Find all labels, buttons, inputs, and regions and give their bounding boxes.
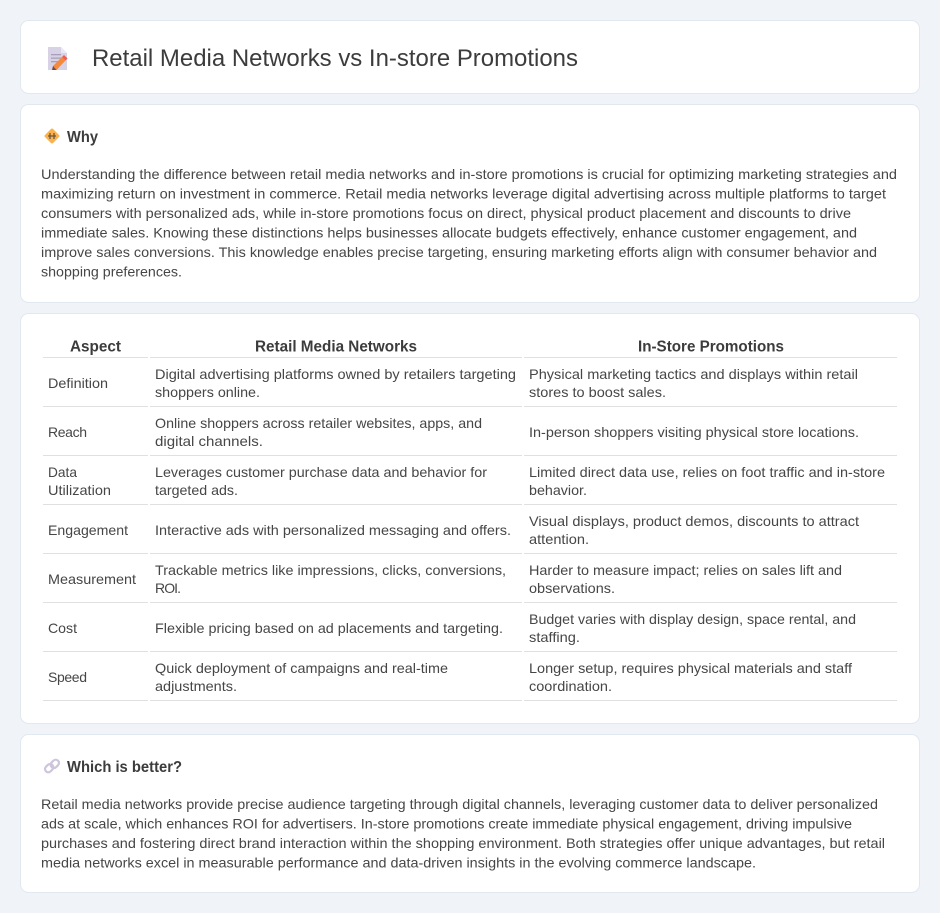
row: engagement: Interactive ads with personalized messaging and offers. <box>155 522 511 538</box>
row: measurement: Measurement <box>48 571 136 587</box>
text block: why paragraph: maximizing return on investment in commerce. Retail media networks leverage digital advertising across multiple platforms to target <box>41 186 886 202</box>
panel: why <box>20 104 920 302</box>
row: definition: Physical marketing tactics and displays within retail <box>529 366 858 382</box>
row: data utilization: Utilization <box>48 482 111 498</box>
table header row <box>70 338 784 356</box>
text block: why paragraph: shopping preferences. <box>41 264 182 280</box>
text block: why paragraph: immediate sales. Knowing these distinctions helps businesses allocate budgets effectively, enhance customer engagement, and <box>41 224 857 240</box>
text block: which is better paragraph: purchases and fostering direct brand interaction within the shopping environment. Both strategies offer unique advantages, but retail <box>41 835 885 851</box>
row: cost: Flexible pricing based on ad placements and targeting. <box>155 620 503 636</box>
row: reach: Reach <box>48 424 87 440</box>
row: reach: In-person shoppers visiting physical store locations. <box>529 424 859 440</box>
row: cost: staffing. <box>529 629 580 645</box>
icon: chain link <box>44 758 60 774</box>
row: cost: Budget varies with display design, space rental, and <box>529 611 856 627</box>
row: data utilization: behavior. <box>529 482 587 498</box>
row: engagement <box>48 513 859 547</box>
row: reach <box>48 415 859 449</box>
text block: which is better paragraph: Retail media networks provide precise audience targeting through digital channels, leveraging customer data to deliver personalized <box>41 796 878 812</box>
row: data utilization: Data <box>48 464 77 480</box>
row: measurement: ROI. <box>155 580 181 596</box>
row: cost: Cost <box>48 620 77 636</box>
row: definition: shoppers online. <box>155 384 260 400</box>
text block: why paragraph: consumers with personalized ads, while in-store promotions focus on direct, physical product placement and discounts to drive <box>41 205 851 221</box>
panel: title header <box>20 20 920 94</box>
row: measurement: Trackable metrics like impressions, clicks, conversions, <box>155 562 506 578</box>
row: measurement <box>48 562 842 596</box>
heading: which is better: Which is better? <box>67 759 182 776</box>
row: speed: Speed <box>48 669 87 685</box>
row: speed: Quick deployment of campaigns and real-time <box>155 660 448 676</box>
row: definition: Digital advertising platforms owned by retailers targeting <box>155 366 516 382</box>
row: data utilization: targeted ads. <box>155 482 238 498</box>
row: speed <box>48 660 852 694</box>
row: definition <box>48 366 858 400</box>
row: reach: digital channels. <box>155 433 263 449</box>
text block: why paragraph: Understanding the difference between retail media networks and in-store promotions is crucial for optimizing marketing strategies and <box>41 166 897 182</box>
icon: warning diamond <box>44 128 60 144</box>
table header row: In-Store Promotions <box>638 338 784 356</box>
text block: which is better paragraph: ads at scale, which enhances ROI for advertisers. In-store promotions create immediate physical engagement, driving impulsive <box>41 816 852 832</box>
text block: why paragraph <box>41 166 897 280</box>
row: definition: Definition <box>48 375 108 391</box>
row: speed: adjustments. <box>155 678 237 694</box>
row: data utilization: Leverages customer purchase data and behavior for <box>155 464 487 480</box>
text block: which is better paragraph: media networks excel in measurable performance and data-driven insights in the evolving commerce landscape. <box>41 854 756 870</box>
row: engagement: attention. <box>529 531 589 547</box>
row: speed: coordination. <box>529 678 612 694</box>
row: speed: Longer setup, requires physical materials and staff <box>529 660 852 676</box>
row: reach: Online shoppers across retailer websites, apps, and <box>155 415 482 431</box>
panel: which is better <box>20 734 920 892</box>
row: engagement: Engagement <box>48 522 128 538</box>
row: data utilization: Limited direct data use, relies on foot traffic and in-store <box>529 464 885 480</box>
row: definition: stores to boost sales. <box>529 384 666 400</box>
row: data utilization <box>48 464 885 498</box>
text block: why paragraph: improve sales conversions. This knowledge enables precise targeting, ensuring marketing efforts align with consumer behavior and <box>41 244 877 260</box>
row: measurement: Harder to measure impact; relies on sales lift and <box>529 562 842 578</box>
table header row: Aspect <box>70 338 122 356</box>
heading: why: Why <box>67 129 98 146</box>
text block: which is better paragraph <box>41 796 885 870</box>
title: Retail Media Networks vs In-store Promotions <box>92 45 578 72</box>
row: cost <box>48 611 856 645</box>
panel: comparison table <box>20 314 920 724</box>
row: engagement: Visual displays, product demos, discounts to attract <box>529 513 859 529</box>
icon: document with pencil <box>48 47 68 70</box>
row: measurement: observations. <box>529 580 615 596</box>
table header row: Retail Media Networks <box>255 338 417 356</box>
